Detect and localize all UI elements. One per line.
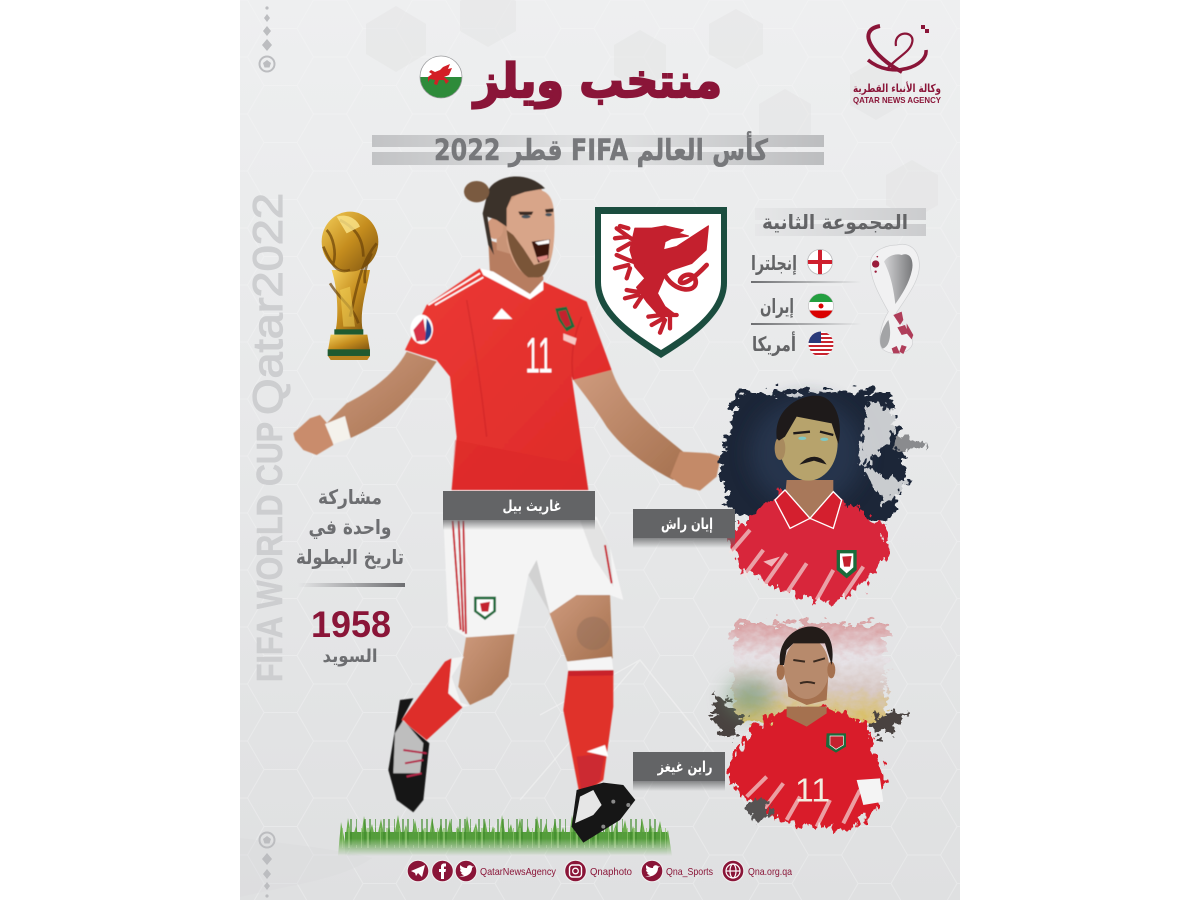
grass <box>338 815 672 856</box>
team: USA: أمريكا <box>752 330 796 356</box>
label: Ian Rush: إيان راش <box>661 515 713 533</box>
logo: Qatar News Agency: QATAR NEWS AGENCY <box>853 95 941 105</box>
lower body <box>388 517 623 812</box>
logo: Qatar News Agency: وكالة الأنباء القطرية <box>853 81 941 95</box>
icon: twitter sports <box>641 860 663 882</box>
text: website: Qna.org.qa <box>748 866 792 878</box>
label: Gareth Bale <box>443 491 595 530</box>
subtitle with bars: كأس العالم FIFA قطر 2022 <box>434 131 768 167</box>
logo: Qatar News Agency <box>853 25 941 105</box>
text: Qna_Sports: Qna_Sports <box>666 866 713 878</box>
icon: globe <box>722 860 744 882</box>
panel: left history stats <box>296 485 405 667</box>
text: one appearance in tournament history <box>296 485 404 569</box>
number: 1958: 1958 <box>311 604 391 645</box>
team: England: إنجلترا <box>751 251 797 275</box>
number 11: 11 <box>795 773 830 810</box>
team: England <box>751 248 834 276</box>
team: USA <box>752 330 834 357</box>
number 11: 11 <box>525 328 553 384</box>
team: Iran <box>760 293 834 320</box>
icon: Wales flag <box>420 56 462 98</box>
vertical text: FIFA WORLD CUP Qatar2022: Qatar2022 <box>244 193 291 415</box>
text: QatarNewsAgency: QatarNewsAgency <box>480 866 557 878</box>
title: منتخب ويلز <box>472 54 722 109</box>
upper body <box>293 177 721 491</box>
text: Qnaphoto: Qnaphoto <box>590 866 632 878</box>
portrait: Ryan Giggs <box>713 623 907 830</box>
background panel <box>240 0 960 900</box>
label: Ryan Giggs: راين غيغز <box>657 758 712 776</box>
text: one appearance in tournament history: تاريخ البطولة <box>296 545 404 569</box>
vertical text: FIFA WORLD CUP Qatar2022 <box>244 193 291 682</box>
team: Iran: إيران <box>760 294 794 318</box>
icon: facebook <box>432 860 453 882</box>
text: Sweden: السويد <box>322 646 378 667</box>
icon: telegram <box>407 860 429 882</box>
label: Ryan Giggs <box>633 752 725 791</box>
top-left decoration <box>260 6 274 71</box>
icon: instagram <box>565 860 586 882</box>
vertical text: FIFA WORLD CUP Qatar2022: FIFA WORLD CUP <box>249 422 290 682</box>
shorts <box>443 517 623 637</box>
portrait: Ian Rush <box>720 390 927 603</box>
text: one appearance in tournament history: واحدة في <box>308 515 392 540</box>
label: Ian Rush <box>633 509 735 548</box>
right boot over grass <box>572 783 635 843</box>
icon: twitter <box>455 860 477 882</box>
footer: social media <box>407 860 792 882</box>
head <box>497 185 547 257</box>
dragon <box>615 226 708 333</box>
label: Gareth Bale: غاريث بيل <box>502 497 562 515</box>
player: Gareth Bale <box>293 177 721 812</box>
heading: group two: المجموعة الثانية <box>762 210 908 234</box>
bottom-left decoration <box>260 832 274 898</box>
infographic <box>240 0 960 900</box>
icon: Qatar 2022 emblem <box>870 244 919 354</box>
icon: World Cup trophy <box>322 212 378 360</box>
text: one appearance in tournament history: مشاركة <box>318 485 382 509</box>
panel: group B <box>751 208 926 357</box>
icon: Wales crest <box>595 207 727 358</box>
